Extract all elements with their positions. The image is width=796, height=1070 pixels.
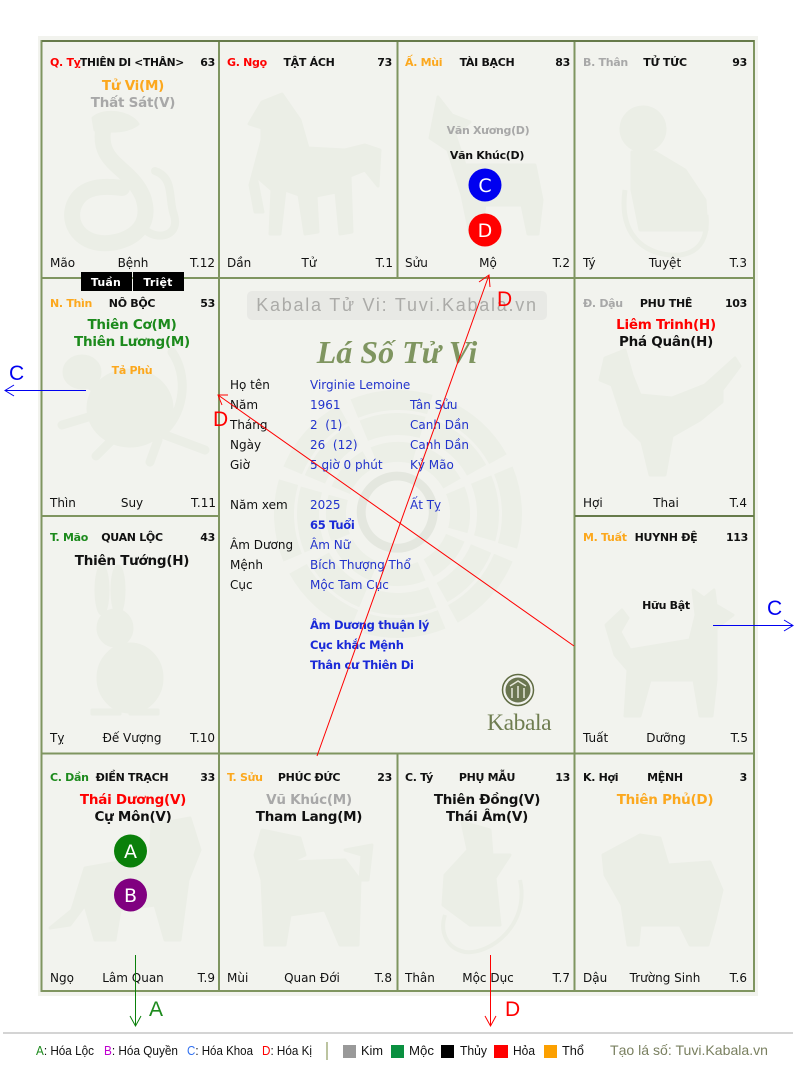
palace: Tử Tức: Tuyệt	[648, 256, 681, 270]
palace: Tử Tức: TỬ TỨC	[643, 55, 687, 69]
arrow: D down: D	[505, 998, 520, 1021]
legend: elements: Thổ	[562, 1043, 584, 1058]
palace: Phụ Mẫu: 13	[555, 771, 570, 784]
palace: Thiên Di: Q. Tỵ	[50, 56, 81, 69]
arrow: C right	[713, 597, 793, 631]
legend: elements: Mộc	[409, 1043, 435, 1058]
birth details: Virginie Lemoine	[310, 378, 410, 392]
palace: Mệnh: K. Hợi	[583, 771, 618, 784]
palace: Phụ Mẫu: PHỤ MẪU	[459, 769, 515, 784]
arrow: D to Mộ	[317, 275, 512, 756]
arrow: D to Nô Bộc: D	[213, 408, 228, 431]
palace: Huynh Đệ: T.5	[730, 731, 748, 745]
palace: Tài Bạch: T.2	[552, 256, 570, 270]
badge D	[468, 214, 502, 246]
birth details: Ất Tỵ	[410, 496, 441, 512]
birth details: Mệnh	[230, 558, 263, 572]
palace: Phụ Mẫu: T.7	[552, 971, 570, 985]
footer site link: Tạo lá số: Tuvi.Kabala.vn	[610, 1042, 768, 1058]
palace: Tật Ách: Dần	[227, 256, 251, 270]
birth details: Năm xem	[230, 498, 288, 512]
palace: Nô Bộc: Thiên Cơ(M)	[87, 317, 177, 333]
palace: Nô Bộc: Suy	[121, 496, 143, 510]
birth details: Bích Thượng Thổ	[310, 558, 411, 572]
palace: Phu Thê: Liêm Trinh(H)	[616, 317, 716, 333]
palace: Phu Thê: PHU THÊ	[640, 297, 692, 310]
badge B	[114, 878, 147, 912]
palace: Quan Lộc: Tỵ	[49, 731, 64, 745]
center watermark: ba gua	[249, 365, 547, 663]
palace: Tử Tức: 93	[732, 56, 747, 69]
Tuần Triệt tags: Triệt	[143, 276, 173, 289]
palace: Phúc Đức: T.8	[374, 971, 392, 985]
palace: Tật Ách: G. Ngọ	[227, 56, 268, 69]
center banner: Kabala Tử Vi: Tuvi.Kabala.vn	[256, 295, 538, 315]
center banner	[247, 291, 547, 320]
birth details: Cục	[230, 578, 253, 592]
palace: Phu Thê: Hợi	[583, 496, 603, 510]
palace: Điền Trạch: Cự Môn(V)	[94, 809, 172, 825]
birth details: Canh Dần	[410, 438, 469, 452]
chart grid lines	[42, 41, 754, 991]
birth details: 5 giờ 0 phút	[310, 458, 383, 472]
palace: Phu Thê: Phá Quân(H)	[619, 334, 713, 350]
badge A	[114, 834, 147, 868]
arrow: D to Mộ: D	[497, 288, 512, 311]
birth details: Cục khắc Mệnh	[310, 638, 404, 652]
palace: Nô Bộc: 53	[200, 297, 215, 310]
arrow: C left: C	[9, 362, 24, 385]
palace: Phúc Đức: Quan Đới	[284, 971, 340, 985]
rabbit	[92, 566, 162, 714]
palace: Tài Bạch	[405, 54, 570, 270]
birth details: Giờ	[230, 458, 251, 472]
legend: transformations: D: Hóa Kị	[262, 1043, 312, 1058]
birth details: 1961	[310, 398, 341, 412]
palace: Quan Lộc: T.10	[189, 731, 215, 745]
palace: Tật Ách	[227, 56, 393, 270]
arrow: A down: A	[149, 998, 163, 1021]
badge B: B	[124, 885, 137, 907]
palace: Điền Trạch: T.9	[197, 971, 215, 985]
palace: Thiên Di: 63	[200, 56, 215, 69]
palace: Mệnh: Thiên Phủ(D)	[617, 792, 713, 808]
palace: Phúc Đức: Mùi	[227, 971, 248, 985]
palace: Thiên Di: Thất Sát(V)	[91, 94, 175, 111]
arrow: C left	[5, 362, 86, 396]
palace: Quan Lộc	[49, 531, 215, 745]
palace: Mệnh: MỆNH	[647, 771, 683, 784]
palace: Nô Bộc: NÔ BỘC	[109, 297, 155, 310]
center title: Lá Số Tử Vi	[316, 334, 477, 370]
palace: Phu Thê: Đ. Dậu	[583, 297, 623, 310]
palace: Huynh Đệ: HUYNH ĐỆ	[635, 531, 697, 544]
birth details: Âm Dương thuận lý	[310, 617, 430, 632]
Tuần Triệt tags	[81, 272, 184, 291]
palace: Phúc Đức: Tham Lang(M)	[256, 809, 362, 825]
palace: Phu Thê: T.4	[729, 496, 747, 510]
palace: Huynh Đệ: Hữu Bật	[642, 599, 690, 612]
arrow: C right: C	[767, 597, 782, 620]
palace: Nô Bộc: Tả Phù	[112, 364, 152, 377]
tiger	[50, 818, 200, 940]
palace: Quan Lộc: Đế Vượng	[103, 731, 161, 745]
birth details: 2025	[310, 498, 341, 512]
palace: Phúc Đức: 23	[377, 771, 392, 784]
horse	[249, 94, 380, 234]
palace: Phu Thê: Thai	[652, 496, 679, 510]
birth details: Tháng	[229, 418, 268, 432]
Kabala logo: Kabala	[487, 710, 552, 736]
monkey	[621, 107, 707, 255]
palace: Tài Bạch: Ấ. Mùi	[405, 54, 442, 69]
birth details: Canh Dần	[410, 418, 469, 432]
palace: Tật Ách: T.1	[375, 256, 393, 270]
badge C: C	[478, 175, 492, 197]
badge A: A	[124, 841, 137, 863]
palace: Tài Bạch: Văn Khúc(D)	[450, 149, 524, 162]
snake	[72, 112, 175, 243]
palace: Điền Trạch: ĐIỀN TRẠCH	[96, 770, 168, 784]
palace: Điền Trạch: 33	[200, 771, 215, 784]
palace: Nô Bộc: N. Thìn	[50, 297, 92, 310]
palace: Điền Trạch: Lâm Quan	[102, 971, 164, 985]
arrow: D to Nô Bộc	[213, 395, 574, 646]
dog	[606, 590, 733, 716]
arrow: D down	[485, 955, 520, 1026]
palace: Phụ Mẫu: Mộc Dục	[462, 971, 514, 985]
palace: Quan Lộc: QUAN LỘC	[101, 531, 163, 544]
palace: Tài Bạch: Mộ	[479, 256, 497, 270]
palace: Phúc Đức: PHÚC ĐỨC	[278, 771, 340, 784]
legend: transformations: C: Hóa Khoa	[187, 1043, 254, 1058]
birth details: Tân Sửu	[409, 398, 458, 412]
palace: Phụ Mẫu: Thiên Đồng(V)	[434, 791, 540, 808]
palace: Phúc Đức: T. Sửu	[227, 771, 263, 784]
palace: Huynh Đệ: Tuất	[582, 731, 608, 745]
legend: elements: Hỏa	[513, 1043, 536, 1058]
birth details	[229, 378, 469, 672]
palace: Huynh Đệ: 113	[726, 531, 748, 544]
palace: Điền Trạch: Thái Dương(V)	[80, 792, 186, 808]
palace: Nô Bộc: Thiên Lương(M)	[74, 334, 190, 350]
palace: Tài Bạch: Sửu	[405, 256, 428, 270]
arrow: A down	[130, 955, 163, 1026]
palace: Tật Ách: 73	[377, 56, 392, 69]
badge D: D	[478, 220, 492, 242]
rooster	[600, 350, 740, 475]
palace: Điền Trạch: Ngọ	[50, 971, 74, 985]
badge C	[468, 168, 502, 202]
birth details: Mộc Tam Cục	[310, 578, 389, 592]
pig	[603, 835, 722, 945]
Kabala logo	[487, 674, 552, 736]
ox	[255, 830, 372, 945]
birth details: Năm	[230, 398, 258, 412]
palace: Phụ Mẫu: Thân	[404, 971, 435, 985]
birth details: Âm Dương	[230, 537, 293, 552]
birth details: Âm Nữ	[310, 537, 352, 552]
legend: elements: Thủy	[460, 1043, 487, 1058]
birth details: 65 Tuổi	[310, 517, 355, 532]
palace: Huynh Đệ	[582, 531, 748, 745]
palace: Mệnh: 3	[740, 771, 747, 784]
palace: Thiên Di: Tử Vi(M)	[102, 78, 164, 94]
palace: Nô Bộc: T.11	[190, 496, 216, 510]
palace: Nô Bộc	[49, 297, 216, 510]
palace: Tật Ách: Tử	[301, 256, 318, 270]
palace: Quan Lộc: Thiên Tướng(H)	[75, 553, 189, 569]
palace: Phu Thê: 103	[725, 297, 747, 310]
palace: Tài Bạch: TÀI BẠCH	[460, 56, 515, 69]
palace: Tài Bạch: 83	[555, 56, 570, 69]
palace: Thiên Di: THIÊN DI <THÂN>	[80, 56, 184, 69]
birth details: Ngày	[230, 438, 261, 452]
palace: Thiên Di: Mão	[50, 256, 75, 270]
birth details: Thân cư Thiên Di	[310, 658, 414, 672]
palace: Tử Tức: B. Thân	[583, 56, 628, 69]
palace: Tử Tức: Tý	[582, 256, 596, 270]
palace: Thiên Di: Bệnh	[118, 256, 148, 270]
legend: elements: Kim	[361, 1043, 383, 1058]
birth details: Kỷ Mão	[410, 458, 454, 472]
palace: Mệnh: Dậu	[583, 971, 607, 985]
birth details: Họ tên	[230, 378, 270, 392]
palace: Tật Ách: TẬT ÁCH	[283, 56, 335, 69]
birth details: 26 (12)	[310, 438, 358, 452]
palace: Mệnh: Trường Sinh	[629, 971, 700, 985]
palace: Phúc Đức: Vũ Khúc(M)	[266, 792, 352, 808]
dragon	[62, 352, 205, 462]
palace: Quan Lộc: 43	[200, 531, 215, 544]
palace: Mệnh: T.6	[729, 971, 747, 985]
palace: Phu Thê	[583, 297, 747, 510]
palace: Điền Trạch	[50, 770, 215, 985]
palace: Phụ Mẫu: C. Tý	[405, 771, 433, 784]
palace: Mệnh	[583, 771, 747, 985]
rat	[443, 822, 510, 925]
birth details: 2 (1)	[310, 418, 342, 432]
goat	[430, 97, 542, 234]
palace: Tử Tức	[582, 55, 747, 270]
palace: Thiên Di: T.12	[189, 256, 215, 270]
palace: Tài Bạch: Văn Xương(D)	[447, 124, 530, 137]
palace: Tử Tức: T.3	[729, 256, 747, 270]
palace: Thiên Di	[50, 56, 215, 270]
palace: Phụ Mẫu	[404, 769, 570, 985]
footer rule	[3, 1032, 793, 1034]
legend: transformations: B: Hóa Quyền	[104, 1043, 178, 1058]
legend: transformations: A: Hóa Lộc	[36, 1043, 94, 1058]
palace: Phụ Mẫu: Thái Âm(V)	[446, 808, 528, 825]
legend: transformations	[36, 1043, 312, 1058]
palace: Phúc Đức	[227, 771, 392, 985]
palace: Điền Trạch: C. Dần	[50, 771, 89, 784]
palace: Nô Bộc: Thìn	[49, 496, 76, 510]
Tuần Triệt tags: Tuần	[91, 276, 121, 289]
zodiac animal watermarks	[50, 94, 740, 952]
palace: Quan Lộc: T. Mão	[50, 531, 89, 544]
palace: Huynh Đệ: Dưỡng	[646, 731, 686, 745]
legend: elements	[343, 1043, 584, 1058]
palace: Huynh Đệ: M. Tuất	[583, 531, 627, 544]
